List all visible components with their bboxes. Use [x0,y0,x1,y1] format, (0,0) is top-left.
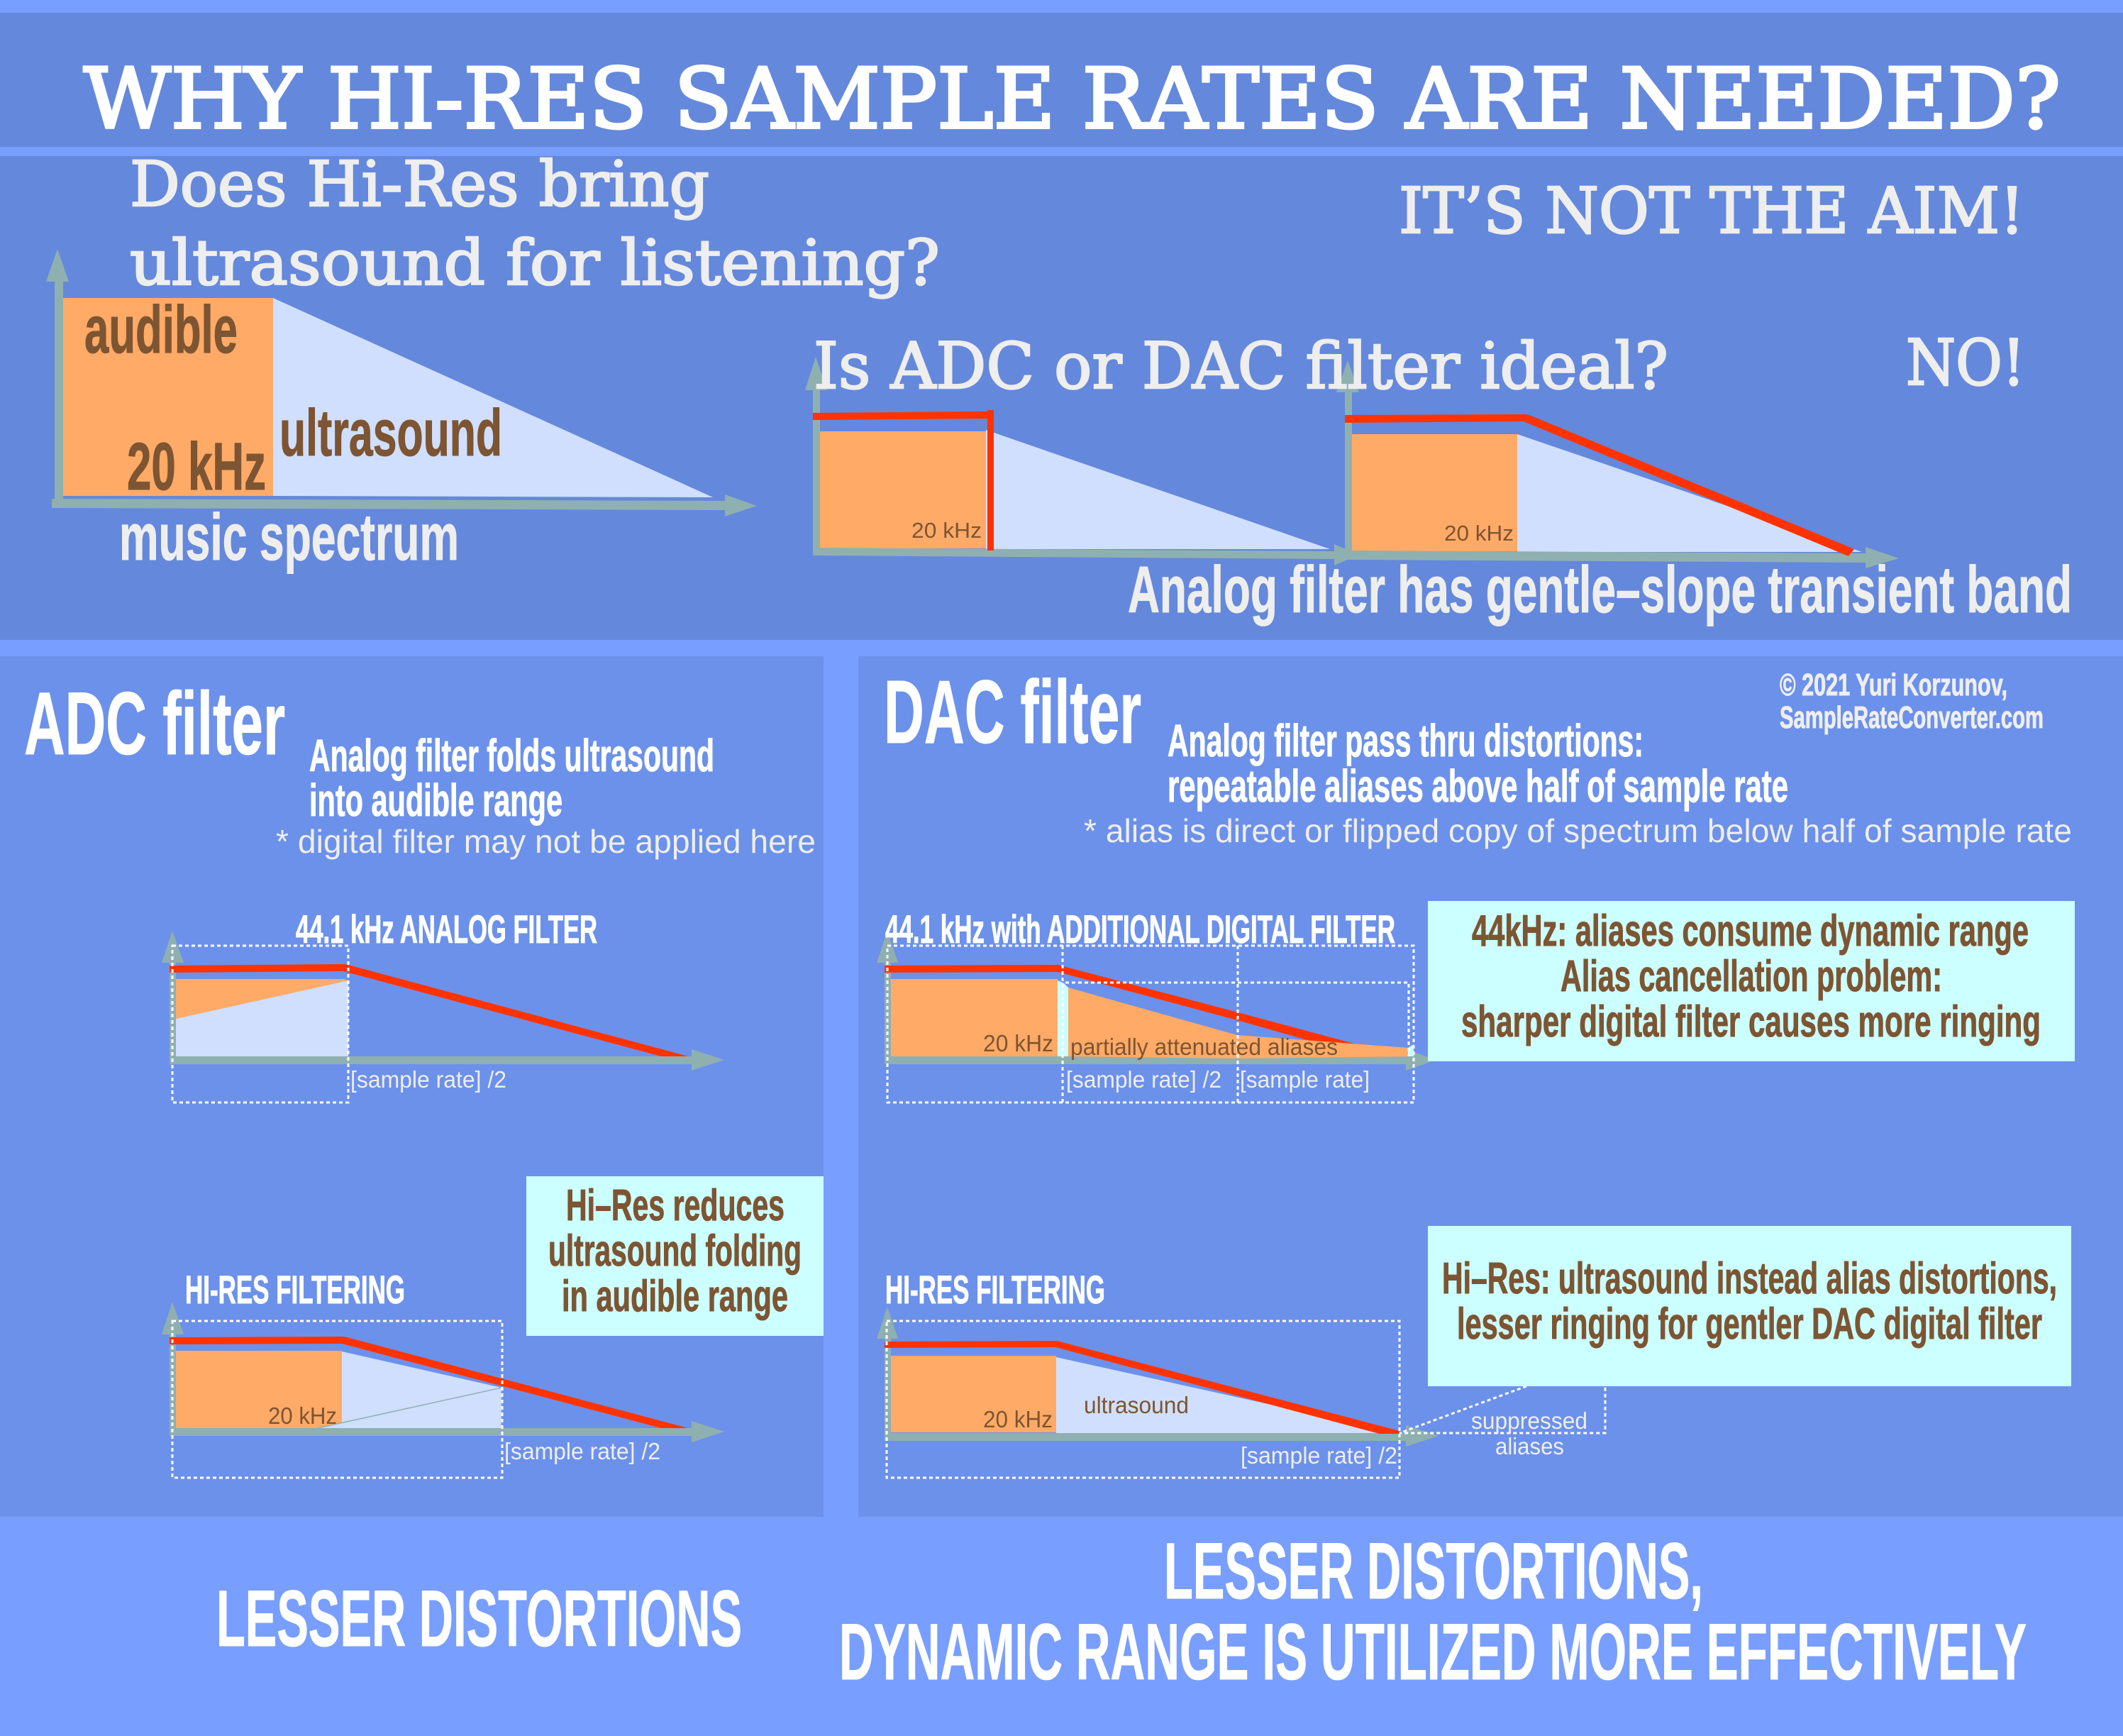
x axis arrow [885,1049,1436,1071]
label: ultrasound: ultrasound [1084,1392,1189,1418]
y axis arrow [877,931,898,1064]
panel: ADC filter [0,656,824,1517]
conclusion line 1: LESSER DISTORTIONS, [1164,1527,1703,1615]
label: sample rate half: [sample rate] /2 [350,1066,506,1093]
dashed half rate divider [1061,946,1064,1102]
ultrasound area [318,1351,501,1429]
ultrasound triangle [986,430,1330,549]
fold outline [318,1388,501,1429]
label: 20 kHz: 20 kHz [911,518,982,543]
conclusion: DAC [839,1527,2027,1696]
ultrasound triangle [1056,1357,1399,1434]
x axis arrow [1348,547,1899,568]
y axis arrow [805,357,827,555]
dashed sample rate box [887,946,1414,1102]
folded line [318,1423,342,1428]
chart: ideal brick-wall filter [805,357,1358,565]
x axis arrow [52,494,757,516]
copyright line 1: © 2021 Yuri Korzunov, [1780,668,2007,702]
note: digital filter: * digital filter may not be applied here [276,823,816,860]
dashed alias box [1065,983,1409,1056]
heading: Does Hi-Res bring: Does Hi-Res bring [130,148,709,221]
chart: gentle analog filter [1336,360,1899,568]
red filter curve [813,410,994,551]
answer: no: NO! [1906,326,2025,399]
callout: hi-res ultrasound [1428,1226,2071,1386]
audible block [176,1351,342,1428]
label: partially attenuated aliases: partially attenuated aliases [1070,1034,1338,1060]
heading: ADC filter: ADC filter [24,675,285,773]
heading: DAC filter: DAC filter [884,662,1141,762]
chart: DAC hi-res filtering [877,1267,1605,1478]
dashed suppressed aliases box [1399,1386,1605,1433]
ultrasound triangle [1517,434,1862,552]
answer: not the aim: IT’S NOT THE AIM! [1399,174,2024,248]
attenuated aliases [1068,988,1409,1058]
label: 20 kHz: 20 kHz [1444,521,1514,546]
label: ultrasound: ultrasound [279,396,502,470]
panel: ultrasound question [0,148,2123,640]
dashed sample rate box [172,1321,502,1478]
label: suppressed: suppressed [1471,1408,1587,1434]
label: 20 kHz: 20 kHz [983,1030,1053,1056]
conclusion: ADC: LESSER DISTORTIONS [216,1574,742,1663]
callout line 3: in audible range [562,1272,788,1321]
note: alias definition: * alias is direct or flipped copy of spectrum below half of sample rate [1084,812,2072,849]
chart title: 44.1 kHz with ADDITIONAL DIGITAL FILTER [885,907,1395,951]
dashed sample rate box [887,1321,1399,1478]
x axis arrow [170,1421,724,1442]
dashed full rate divider [1237,946,1238,1102]
title: WHY HI-RES SAMPLE RATES ARE NEEDED? [84,50,2061,148]
callout: hi-res reduces folding [526,1176,824,1336]
dashed sample rate box [172,946,348,1102]
description: pass thru distortions: Analog filter pass thru distortions: [1168,715,1643,766]
label: 20 kHz: 20 kHz [268,1403,337,1429]
end transition strip [1408,1044,1414,1056]
callout: 44 kHz aliases [1428,901,2075,1061]
audible block [819,431,986,548]
label: audible: audible [84,292,238,367]
y axis arrow [46,249,69,507]
y axis arrow [162,1302,184,1436]
heading: ultrasound for listening: ultrasound for listening? [130,226,940,299]
x axis arrow [887,1425,1439,1447]
transition strip [1058,980,1068,1056]
x axis arrow [813,544,1358,565]
label: 20 kHz: 20 kHz [127,429,266,504]
chart: 44.1 kHz analog filter [162,907,724,1102]
chart: ADC hi-res filtering [162,1267,724,1478]
panel: DAC filter [858,656,2123,1517]
folded ultrasound area [176,980,348,1056]
red filter curve [170,1337,688,1428]
red filter curve [885,1341,1399,1434]
panel: title band [0,13,2123,148]
label: sample rate half: [sample rate] /2 [1241,1442,1397,1469]
label: 20 kHz: 20 kHz [983,1406,1053,1432]
red filter curve [885,965,1354,1052]
audible block [61,298,273,496]
chart title: HI-RES FILTERING [885,1267,1105,1312]
description: repeatable aliases: repeatable aliases above half of sample rate [1168,761,1788,812]
label: music spectrum: music spectrum [119,500,459,574]
y axis arrow [877,1307,898,1441]
description: folds ultrasound: Analog filter folds ultrasound [309,730,714,781]
description: into audible range: into audible range [309,775,562,826]
chart: music spectrum [46,249,757,574]
y axis arrow [1336,360,1359,559]
label: sample rate half: [sample rate] /2 [504,1438,660,1464]
red filter curve [1345,414,1854,556]
label: aliases: aliases [1495,1433,1564,1459]
ultrasound triangle [273,298,713,497]
y axis arrow [162,931,184,1064]
audible block [891,979,1058,1056]
heading: filter ideal question: Is ADC or DAC filter ideal? [814,329,1668,404]
chart title: HI-RES FILTERING [185,1267,405,1312]
x axis arrow [170,1049,724,1071]
remaining audible area [176,979,348,1019]
callout line 1: Hi–Res reduces [566,1181,785,1230]
red filter curve [170,964,688,1056]
chart: 44.1 kHz with digital filter [877,907,1436,1102]
chart title: 44.1 kHz ANALOG FILTER [296,907,597,951]
callout line 2: ultrasound folding [548,1227,802,1276]
audible block [891,1356,1056,1432]
label: sample rate half: [sample rate] /2 [1066,1066,1221,1093]
callout line 2: Alias cancellation problem: [1561,952,1942,1001]
audible block [1352,434,1517,551]
label: sample rate: [sample rate] [1240,1066,1370,1093]
